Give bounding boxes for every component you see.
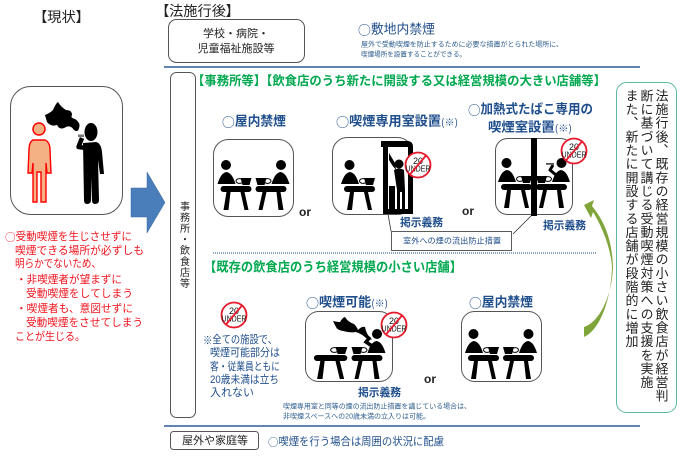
panel: indoor no smoking existing shops: ○屋内禁煙 xyxy=(469,292,533,312)
label: signage required: 掲示義務 xyxy=(400,215,443,229)
text block: no smoking on premises: 屋外で受動喫煙を防止するために必要な措置がとられた場所に、 xyxy=(361,40,563,48)
callout: prevent smoke leaking outdoors xyxy=(388,214,532,250)
icon: smoking booth xyxy=(381,141,413,214)
text block: current problems in red: ○受動喫煙を生じさせずに xyxy=(5,229,132,245)
text block: current problems in red xyxy=(5,229,144,343)
heading: current situation: 【現状】 xyxy=(40,9,83,25)
text block: smoke leakage footnote: 喫煙専用室と同等の煙の流出防止措置を講じている場合は、 xyxy=(283,402,471,410)
panel: support measures note: 法施行後、既存の経営規模の小さい飲食店が経営判 xyxy=(654,89,668,403)
text block: current problems in red: 喫煙できる場所が必ずしも xyxy=(15,243,144,257)
panel: heated tobacco smoking room xyxy=(468,100,593,232)
text block: under 20 note: ※全ての施設で、 xyxy=(203,332,277,348)
text block: current problems in red: ・非喫煙者が望まずに xyxy=(16,272,122,286)
text block: no smoking on premises: 喫煙場所を設置することができる。 xyxy=(361,50,466,58)
arrow: current to after enforcement xyxy=(131,172,165,233)
text block: smoke leakage footnote xyxy=(283,402,471,420)
text block: under 20 note: 客・従業員ともに xyxy=(210,359,280,373)
panel: heated tobacco smoking room: ○加熱式たばこ専用の xyxy=(468,100,593,118)
label: or: or xyxy=(462,204,474,218)
text block: current problems in red: 受動喫煙をさせてしまう xyxy=(26,315,143,329)
callout: prevent smoke leaking outdoors: 室外への煙の流出防止措置 xyxy=(403,236,501,246)
panel: indoor no smoking xyxy=(214,112,294,216)
text block: smoke leakage footnote: 非喫煙スペースへの20歳未満の立入りは可能。 xyxy=(283,412,430,420)
panel: smoking permitted xyxy=(306,292,407,399)
label: signage required: 掲示義務 xyxy=(543,218,586,232)
heading: after enforcement: 【法施行後】 xyxy=(162,3,233,19)
text block: current problems in red: ・喫煙者も、意図せずに xyxy=(16,302,133,315)
icon: under 20 prohibited xyxy=(562,138,587,164)
icon: smoker in black xyxy=(78,123,104,204)
label: or: or xyxy=(299,205,311,219)
panel: heated tobacco smoking room: 喫煙室設置(※) xyxy=(488,120,572,134)
arrow: curved green gradual increase xyxy=(584,200,613,337)
panel: schools and hospitals: 児童福祉施設等 xyxy=(198,41,274,55)
text block: consideration when smoking: ○喫煙を行う場合は周囲の状況に配慮 xyxy=(268,434,444,450)
text block: under 20 note: 20歳未満は立ち xyxy=(210,372,279,386)
panel: schools and hospitals xyxy=(168,20,304,62)
panel: dedicated smoking room xyxy=(332,112,458,229)
panel: support measures note xyxy=(616,82,676,412)
text block: current problems in red: 受動喫煙をしてしまう xyxy=(26,286,133,300)
panel: indoor no smoking: ○屋内禁煙 xyxy=(222,112,286,130)
icon: smoke xyxy=(333,317,372,340)
panel: indoor no smoking existing shops xyxy=(462,292,542,382)
panel: smoking permitted: ○喫煙可能(※) xyxy=(306,292,388,312)
panel: current situation illustration xyxy=(10,86,122,214)
icon: non-smoker in red xyxy=(28,123,51,202)
panel: support measures note: また、新たに開設する店舗が段階的に増加 xyxy=(624,89,638,349)
icon: smoke cloud xyxy=(45,102,80,131)
text block: under 20 note xyxy=(203,302,280,399)
label: signage required: 掲示義務 xyxy=(358,385,401,399)
label: or: or xyxy=(424,372,436,386)
text block: under 20 note: 喫煙可能部分は xyxy=(210,345,280,359)
text block: under 20 note: 入れない xyxy=(210,386,254,399)
text block: no smoking on premises xyxy=(358,20,563,58)
heading: offices and new or large restaurants: 【事務所等】【飲食店のうち新たに開設する又は経営規模の大きい店舗等】 xyxy=(192,73,606,88)
panel: outdoors and home xyxy=(170,432,258,450)
panel: offices and restaurants side label: 事務所・飲食店等 xyxy=(178,200,190,289)
panel: outdoors and home: 屋外や家庭等 xyxy=(182,433,248,447)
icon: under 20 prohibited xyxy=(222,302,247,328)
text block: no smoking on premises: ○敷地内禁煙 xyxy=(358,20,435,38)
panel: schools and hospitals: 学校・病院・ xyxy=(203,26,269,40)
text block: current problems in red: 明らかでないため、 xyxy=(15,257,101,270)
panel: support measures note: 断に基づいて講じる受動喫煙対策への支援を実施 xyxy=(638,89,654,389)
icon: under 20 prohibited xyxy=(406,152,431,178)
icon: under 20 prohibited xyxy=(382,312,407,338)
heading: existing small restaurants: 【既存の飲食店のうち経営規模の小さい店舗】 xyxy=(204,260,462,274)
text block: current problems in red: ことが生じる。 xyxy=(15,329,85,343)
panel: dedicated smoking room: ○喫煙専用室設置(※) xyxy=(336,112,458,130)
panel: offices and restaurants side label xyxy=(170,72,196,418)
